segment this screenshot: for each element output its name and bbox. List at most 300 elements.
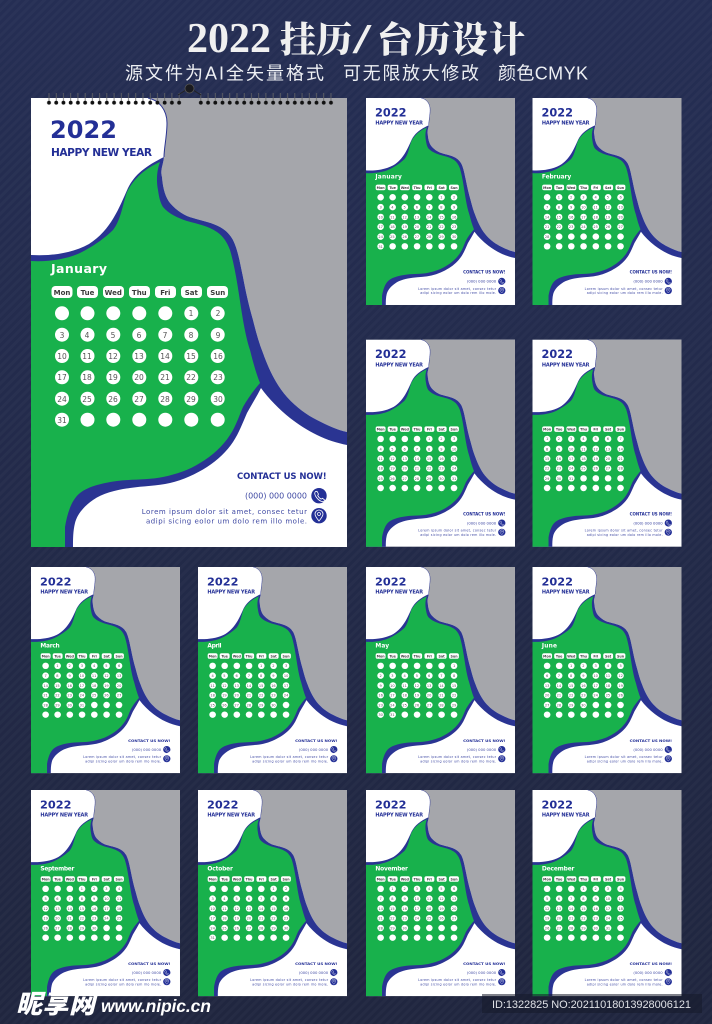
weekdays: Mon — [543, 877, 552, 881]
days: 10 — [284, 674, 288, 678]
watermark logo: 昵享网 — [16, 989, 99, 1019]
days — [378, 437, 457, 481]
days: 25 — [92, 693, 96, 697]
days: 5 — [223, 674, 226, 678]
day numbers: 9 — [216, 331, 221, 340]
days: 9 — [453, 206, 455, 210]
days: 6 — [236, 674, 238, 678]
contact: adipi sicing eolor um dolo rem illo mole. — [587, 982, 663, 986]
contact: adipi sicing eolor um dolo rem illo mole. — [587, 291, 663, 295]
days: 11 — [618, 897, 623, 901]
days: 21 — [247, 693, 251, 697]
day numbers: 30 — [213, 395, 223, 404]
days: 23 — [402, 916, 407, 920]
weekdays: Thu — [79, 877, 86, 881]
weekdays: Sun — [450, 654, 458, 658]
days: 4 — [620, 887, 623, 891]
days: 28 — [439, 704, 444, 708]
heading: May — [375, 643, 389, 649]
days: 31 — [452, 477, 456, 481]
days: 18 — [378, 467, 383, 471]
weekdays: Tue — [556, 428, 563, 432]
days: 15 — [439, 215, 444, 219]
days: 15 — [80, 907, 84, 911]
days: 9 — [272, 674, 275, 678]
contact: (000) 000 0000 — [132, 971, 162, 975]
days: 27 — [618, 225, 623, 229]
days: 25 — [427, 916, 431, 920]
days: 15 — [569, 684, 573, 688]
days: 12 — [618, 674, 623, 678]
weekday labels: Sat — [185, 289, 199, 297]
days: 14 — [439, 684, 444, 688]
days — [545, 664, 623, 708]
days: 16 — [593, 907, 598, 911]
contact — [83, 961, 171, 986]
weekdays: Fri — [427, 428, 432, 432]
weekdays: Fri — [427, 877, 432, 881]
days: 31 — [210, 936, 215, 940]
days: 23 — [92, 916, 96, 920]
days: 18 — [390, 225, 395, 229]
days: 16 — [581, 684, 586, 688]
heading: September — [40, 866, 75, 872]
contact: (000) 000 0000 — [132, 748, 162, 752]
days: 26 — [390, 477, 395, 481]
heading: HAPPY NEW YEAR — [542, 590, 590, 596]
weekdays: Mon — [377, 186, 385, 190]
heading — [541, 575, 590, 649]
days: 18 — [222, 916, 227, 920]
days: 5 — [546, 897, 548, 901]
days: 12 — [593, 447, 598, 451]
days: 28 — [43, 704, 48, 708]
weekdays: Mon — [377, 654, 385, 658]
days: 13 — [452, 897, 456, 901]
days: 8 — [582, 897, 585, 901]
weekdays: Sat — [438, 877, 445, 881]
days: 10 — [569, 447, 573, 451]
day numbers: 24 — [57, 395, 67, 404]
days: 17 — [593, 684, 598, 688]
days: 16 — [439, 457, 444, 461]
panel: small June — [532, 567, 681, 773]
days: 11 — [427, 897, 431, 901]
days: 10 — [80, 674, 84, 678]
days: 24 — [210, 927, 216, 931]
contact: (000) 000 0000 — [299, 971, 329, 975]
days: 13 — [618, 206, 623, 210]
days: 18 — [606, 684, 610, 688]
panel: small October — [198, 790, 347, 996]
days: 19 — [545, 916, 549, 920]
contact: adipi sicing eolor um dolo rem illo mole. — [420, 982, 496, 986]
contact block: (000) 000 0000 — [245, 492, 307, 500]
days: 29 — [581, 927, 586, 931]
day numbers: 25 — [82, 395, 92, 404]
contact: adipi sicing eolor um dolo rem illo mole. — [420, 759, 496, 763]
contact: CONTACT US NOW! — [630, 961, 672, 966]
days: 14 — [247, 684, 252, 688]
days: 23 — [569, 225, 573, 229]
days: 12 — [606, 206, 610, 210]
days: 18 — [402, 693, 407, 697]
heading: HAPPY NEW YEAR — [375, 590, 423, 596]
heading: 2022 — [375, 107, 407, 119]
heading: 2022 — [541, 798, 573, 811]
days: 24 — [569, 467, 574, 471]
days: 26 — [222, 704, 227, 708]
days: 17 — [284, 684, 288, 688]
days: 8 — [81, 897, 83, 901]
days: 8 — [260, 674, 262, 678]
contact: adipi sicing eolor um dolo rem illo mole. — [420, 291, 496, 295]
days: 24 — [80, 693, 85, 697]
subtitle: 可无限放大修改 — [343, 64, 479, 84]
contact: Lorem ipsum dolor sit amet, consec tetur — [585, 287, 663, 291]
days: 29 — [80, 927, 84, 931]
days: 2 — [69, 664, 71, 668]
days: 30 — [271, 704, 276, 708]
days: 30 — [402, 927, 407, 931]
days: 12 — [390, 457, 395, 461]
days: 8 — [391, 897, 394, 901]
days: 28 — [415, 477, 419, 481]
weekdays: Thu — [580, 186, 588, 190]
weekdays — [209, 877, 290, 881]
weekdays — [377, 654, 458, 658]
weekdays: Sun — [282, 654, 290, 658]
contact: CONTACT US NOW! — [463, 270, 506, 275]
weekdays: Sat — [605, 877, 612, 881]
days: 15 — [390, 907, 395, 911]
days: 16 — [92, 907, 96, 911]
days: 9 — [285, 897, 287, 901]
days: 14 — [67, 907, 73, 911]
day numbers: 10 — [57, 352, 67, 361]
days: 1 — [428, 437, 430, 441]
weekdays: Thu — [414, 654, 421, 658]
days: 7 — [379, 897, 382, 901]
days: 14 — [569, 907, 574, 911]
days: 12 — [104, 674, 109, 678]
days: 19 — [402, 225, 407, 229]
day numbers: 27 — [134, 395, 144, 404]
day numbers: 17 — [57, 373, 67, 382]
days: 30 — [452, 235, 456, 239]
weekdays: Sun — [450, 877, 458, 881]
days: 4 — [379, 447, 383, 451]
days: 21 — [43, 693, 48, 697]
day numbers: 7 — [163, 331, 168, 340]
days: 23 — [439, 467, 444, 471]
days: 24 — [390, 704, 395, 708]
panel: small March — [31, 567, 180, 773]
weekdays: Sat — [103, 877, 110, 881]
days: 18 — [427, 907, 431, 911]
weekdays: Fri — [593, 186, 598, 190]
days: 22 — [439, 225, 444, 229]
days: 19 — [606, 215, 610, 219]
days: 29 — [55, 704, 60, 708]
day numbers: 29 — [186, 395, 196, 404]
contact block: CONTACT US NOW! — [237, 472, 327, 482]
days: 24 — [284, 693, 289, 697]
weekdays: Wed — [233, 654, 242, 658]
days: 10 — [378, 215, 383, 219]
days: 11 — [222, 907, 227, 911]
days: 22 — [390, 916, 395, 920]
weekdays: Mon — [543, 186, 552, 190]
days: 22 — [545, 467, 549, 471]
day numbers: 26 — [108, 395, 118, 404]
weekdays: Fri — [427, 654, 432, 658]
heading: December — [542, 866, 575, 872]
weekdays: Thu — [414, 186, 421, 190]
days: 11 — [210, 684, 215, 688]
weekdays: Wed — [401, 654, 410, 658]
contact: adipi sicing eolor um dolo rem illo mole. — [420, 533, 496, 537]
panel: small September — [31, 790, 180, 996]
days: 22 — [271, 916, 276, 920]
days: 24 — [452, 467, 457, 471]
days: 4 — [404, 674, 407, 678]
days: 7 — [440, 674, 443, 678]
weekdays: Thu — [414, 877, 421, 881]
days: 21 — [569, 916, 573, 920]
days: 21 — [545, 225, 549, 229]
heading: HAPPY NEW YEAR — [542, 813, 590, 819]
heading: April — [207, 643, 222, 649]
days: 15 — [452, 684, 456, 688]
days: 14 — [43, 684, 49, 688]
days: 5 — [391, 447, 394, 451]
weekdays: Tue — [556, 654, 563, 658]
weekdays: Sun — [617, 877, 625, 881]
days: 1 — [440, 196, 443, 199]
watermark logo: www.nipic.cn — [101, 996, 211, 1016]
days: 3 — [453, 437, 455, 441]
days: 3 — [379, 206, 382, 210]
days: 26 — [104, 693, 109, 697]
weekdays: Wed — [401, 186, 410, 190]
contact: Lorem ipsum dolor sit amet, consec tetur — [250, 978, 329, 982]
days: 8 — [56, 674, 59, 678]
contact: CONTACT US NOW! — [630, 738, 672, 743]
days: 7 — [620, 437, 622, 441]
days: 21 — [67, 916, 72, 920]
days: 20 — [452, 907, 456, 911]
days: 20 — [117, 684, 121, 688]
contact — [250, 961, 338, 986]
days: 19 — [593, 457, 598, 461]
weekdays: Fri — [593, 428, 598, 432]
days: 20 — [618, 215, 623, 219]
weekdays: Sat — [439, 428, 445, 432]
days: 22 — [259, 693, 263, 697]
days: 13 — [427, 684, 431, 688]
panel: large January calendar — [31, 98, 347, 547]
day numbers: 1 — [189, 309, 194, 318]
weekdays: Tue — [556, 877, 563, 881]
days: 4 — [118, 887, 121, 891]
days: 16 — [557, 457, 561, 461]
days: 31 — [390, 713, 395, 717]
weekdays: Mon — [377, 428, 385, 432]
days: 4 — [93, 664, 96, 668]
days: 21 — [439, 693, 444, 697]
contact: Lorem ipsum dolor sit amet, consec tetur — [585, 755, 663, 759]
weekdays — [377, 428, 458, 432]
contact: Lorem ipsum dolor sit amet, consec tetur — [83, 978, 162, 982]
days: 28 — [259, 927, 263, 931]
weekdays: Tue — [54, 654, 62, 658]
weekdays: Fri — [92, 654, 97, 658]
weekdays: Wed — [66, 654, 75, 658]
heading — [40, 575, 88, 649]
contact: (000) 000 0000 — [467, 971, 497, 975]
days: 23 — [581, 693, 586, 697]
days: 19 — [234, 916, 239, 920]
days — [378, 196, 456, 249]
weekdays: Tue — [389, 428, 397, 432]
days: 4 — [582, 437, 585, 441]
weekdays: Tue — [221, 877, 229, 881]
days: 19 — [104, 684, 109, 688]
days: 27 — [557, 927, 561, 931]
days: 27 — [117, 693, 121, 697]
days: 3 — [285, 664, 287, 668]
contact: (000) 000 0000 — [299, 748, 329, 752]
contact: CONTACT US NOW! — [630, 270, 672, 275]
days: 9 — [570, 206, 572, 210]
days: 9 — [69, 674, 71, 678]
days: 6 — [546, 674, 548, 678]
days: 7 — [570, 897, 572, 901]
days: 15 — [55, 684, 60, 688]
contact: Lorem ipsum dolor sit amet, consec tetur — [418, 978, 497, 982]
contact: (000) 000 0000 — [467, 280, 497, 284]
days: 29 — [545, 477, 549, 481]
weekdays: Mon — [543, 654, 552, 658]
weekday labels: Wed — [105, 289, 122, 297]
days: 30 — [378, 713, 383, 717]
days — [43, 887, 121, 931]
contact: CONTACT US NOW! — [630, 511, 672, 516]
days: 28 — [67, 927, 72, 931]
weekdays: Wed — [567, 877, 576, 881]
day numbers: 28 — [160, 395, 170, 404]
days: 12 — [402, 215, 407, 219]
weekdays: Fri — [593, 877, 598, 881]
contact block — [142, 472, 327, 526]
days: 3 — [105, 887, 108, 891]
days: 6 — [248, 897, 250, 901]
days: 12 — [43, 907, 48, 911]
days: 26 — [43, 927, 48, 931]
heading: 2022 — [541, 348, 573, 361]
weekdays: Tue — [389, 877, 397, 881]
day numbers: 12 — [108, 352, 118, 361]
weekdays: Sat — [605, 654, 612, 658]
weekdays — [543, 428, 625, 432]
heading: 2022 — [207, 575, 239, 588]
days: 21 — [427, 225, 431, 229]
day numbers: 3 — [60, 331, 65, 340]
heading: November — [375, 866, 408, 872]
days: 15 — [545, 457, 549, 461]
contact: CONTACT US NOW! — [463, 738, 506, 743]
days: 7 — [558, 674, 560, 678]
days: 15 — [581, 907, 586, 911]
days: 14 — [259, 907, 264, 911]
days: 8 — [570, 674, 572, 678]
days: 5 — [44, 897, 47, 901]
days: 5 — [236, 897, 238, 901]
title: 挂历 — [280, 20, 352, 60]
heading: 2022 — [40, 798, 72, 811]
days: 15 — [271, 907, 276, 911]
days: 25 — [117, 916, 121, 920]
weekdays: Tue — [389, 654, 397, 658]
days: 26 — [439, 916, 444, 920]
heading: February — [542, 175, 571, 181]
days: 13 — [545, 684, 549, 688]
weekdays: Mon — [209, 654, 217, 658]
days: 12 — [439, 897, 444, 901]
heading: January — [374, 175, 402, 181]
weekdays — [209, 654, 290, 658]
weekdays: Tue — [54, 877, 62, 881]
days: 29 — [390, 927, 395, 931]
days: 10 — [210, 907, 215, 911]
contact: (000) 000 0000 — [633, 521, 663, 525]
days: 1 — [558, 196, 560, 199]
weekdays: Thu — [580, 428, 588, 432]
days: 2 — [440, 437, 443, 441]
days: 16 — [284, 907, 288, 911]
days: 2 — [272, 664, 275, 668]
days: 19 — [43, 916, 48, 920]
days: 20 — [247, 916, 251, 920]
heading: June — [541, 643, 557, 649]
contact: (000) 000 0000 — [467, 521, 497, 525]
contact: Lorem ipsum dolor sit amet, consec tetur — [250, 755, 329, 759]
days: 7 — [248, 674, 250, 678]
days: 26 — [618, 693, 623, 697]
days: 10 — [415, 897, 419, 901]
days: 25 — [581, 467, 586, 471]
days: 18 — [593, 215, 598, 219]
days: 14 — [545, 215, 550, 219]
days: 25 — [210, 704, 215, 708]
days: 13 — [234, 684, 239, 688]
weekdays: Sat — [103, 654, 110, 658]
days: 10 — [104, 897, 109, 901]
days: 30 — [439, 477, 444, 481]
days: 22 — [55, 693, 60, 697]
days: 16 — [67, 684, 72, 688]
days: 24 — [378, 235, 384, 239]
days: 11 — [390, 215, 395, 219]
days: 16 — [402, 907, 407, 911]
days: 9 — [379, 684, 382, 688]
contact — [585, 738, 672, 763]
weekdays: Sat — [605, 186, 612, 190]
days: 27 — [452, 916, 456, 920]
days: 9 — [440, 447, 443, 451]
days: 2 — [379, 674, 382, 678]
